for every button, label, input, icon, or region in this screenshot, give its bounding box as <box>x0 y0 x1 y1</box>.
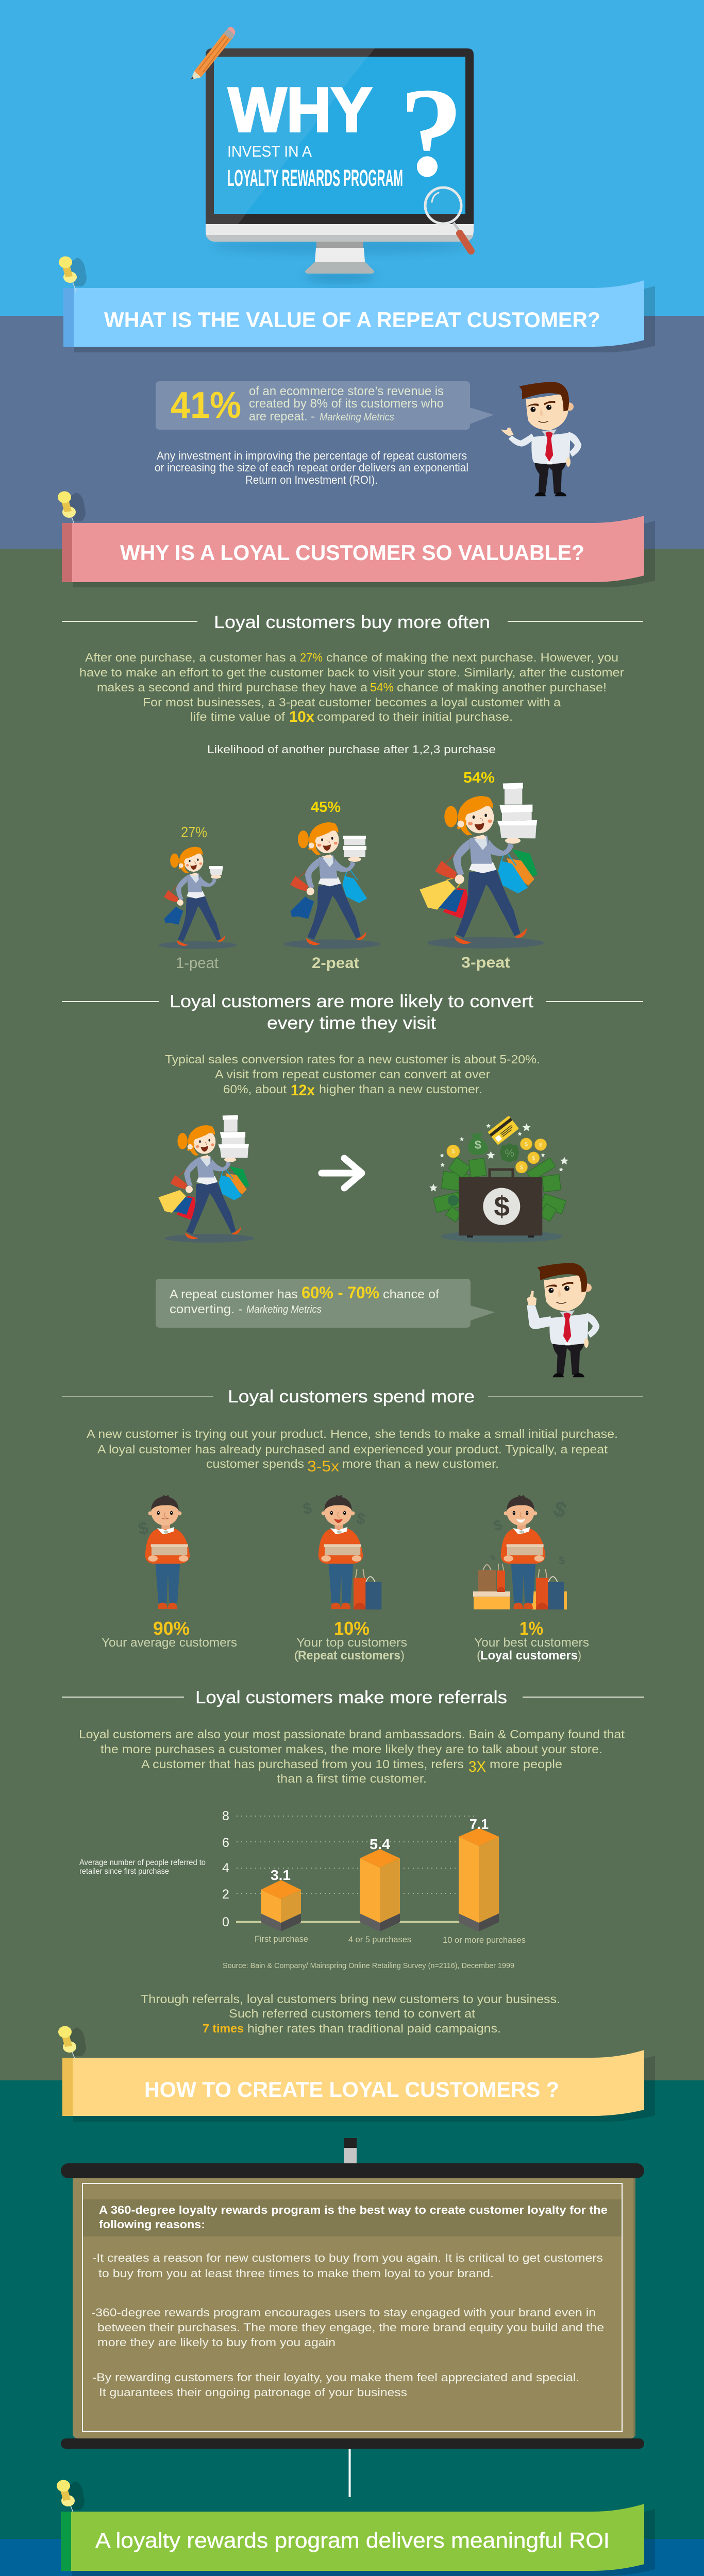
text block: spend more <box>87 1427 618 1475</box>
text block: conversion: Typical sales conversion rates for a new customer is about 5-20%. <box>165 1053 540 1066</box>
text block: spend more: customer spends <box>206 1457 304 1470</box>
title text: WHY <box>228 75 372 145</box>
figure: average customer: 90% <box>153 1618 190 1639</box>
text block: conversion: A visit from repeat customer can convert at over <box>215 1067 490 1081</box>
panel heading: A 360-degree loyalty rewards program is the best way to create customer loyalty for the <box>99 2204 608 2216</box>
callout: 41 percent: of an ecommerce store’s revenue is <box>249 384 444 398</box>
section heading: spend more: Loyal customers spend more <box>228 1387 475 1406</box>
banner: how to create loyal customers: HOW TO CREATE LOYAL CUSTOMERS ? <box>144 2077 559 2102</box>
section heading: more likely to convert: every time they visit <box>267 1013 437 1033</box>
figure: 2-peat shopper: 45% <box>311 799 341 816</box>
figure: best customer: $ <box>492 1517 504 1535</box>
figure: top customer: ( <box>294 1649 299 1663</box>
y axis labels: 4 <box>222 1861 229 1875</box>
text block: referrals: more people <box>490 1757 562 1771</box>
figure: best customer: Your best customers <box>474 1636 589 1650</box>
text block: buy more often: 54% <box>370 681 394 694</box>
icon: briefcase of money <box>429 1115 568 1243</box>
callout: 41 percent <box>156 381 494 430</box>
text block: buy more often: 10x <box>289 708 314 725</box>
icon: briefcase of money: $ <box>451 1149 455 1155</box>
reason 2: -360-degree rewards program encourages users to stay engaged with your brand even in <box>91 2306 596 2319</box>
text block: buy more often: For most businesses, a 3-peat customer becomes a loyal customer with a <box>143 696 561 709</box>
figure: top customer: Repeat customers <box>298 1649 400 1663</box>
figure: 3-peat shopper: 54% <box>463 770 495 786</box>
text block: referrals: 3X <box>468 1758 486 1775</box>
figure: 3-peat shopper <box>420 770 544 971</box>
icon: briefcase of money: $ <box>520 1164 524 1171</box>
icon: briefcase of money: $ <box>532 1155 535 1161</box>
figure: average customer <box>102 1495 237 1650</box>
callout: 41 percent: Marketing Metrics <box>320 412 394 423</box>
text block: buy more often: have to make an effort to get the customer back to visit your store. Similarly, after the customer <box>79 666 624 679</box>
figure: best customer: $ <box>489 1553 497 1562</box>
text block: conversion: higher than a new customer. <box>319 1082 482 1096</box>
big question mark: ? <box>399 61 463 203</box>
text block: buy more often: life time value of <box>190 710 286 723</box>
section heading: more likely to convert: Loyal customers are more likely to convert <box>170 992 534 1011</box>
bar: 4 or 5 purchases <box>360 1836 400 1931</box>
text block: spend more: A new customer is trying out your product. Hence, she tends to make a small initial purchase. <box>87 1427 618 1440</box>
background band: blue <box>0 2539 704 2576</box>
figure: 2-peat shopper <box>284 799 380 972</box>
y axis labels: 0 <box>222 1915 229 1929</box>
text block: spend more: more than a new customer. <box>342 1457 499 1470</box>
text block: spend more: A loyal customer has already purchased and experienced your product. Typically, a repeat <box>97 1443 608 1456</box>
icon: pin <box>58 2026 86 2061</box>
callout: 41 percent: created by 8% of its customers who <box>249 397 444 411</box>
text block: referred customers: Such referred customers tend to convert at <box>229 2007 476 2020</box>
banner: why is a loyal customer so valuable <box>62 516 655 587</box>
text block: referrals <box>79 1727 625 1785</box>
text block: investment: Return on Investment (ROI). <box>245 473 378 486</box>
callout: 41 percent: 41% <box>171 385 241 426</box>
figure: best customer: Loyal customers <box>480 1649 578 1663</box>
y axis title <box>79 1858 206 1876</box>
icon: briefcase of money: % <box>505 1147 514 1159</box>
background band: green <box>0 549 704 2080</box>
icon: pin <box>57 2480 85 2515</box>
background band: teal <box>0 2080 704 2539</box>
text block: conversion: 60%, about <box>223 1082 287 1096</box>
text block: buy more often <box>79 651 624 725</box>
background band: slate <box>0 316 704 549</box>
title monitor: LOYALTY REWARDS PROGRAM <box>227 165 403 191</box>
reason 1: -It creates a reason for new customers to buy from you again. It is critical to get customers <box>92 2251 603 2264</box>
connector line <box>348 2449 350 2497</box>
callout: 60 to 70 percent: A repeat customer has <box>170 1287 298 1301</box>
banner: why is a loyal customer so valuable: WHY IS A LOYAL CUSTOMER SO VALUABLE? <box>120 540 584 565</box>
figure: top customer: Your top customers <box>296 1636 407 1650</box>
figure: best customer: 1% <box>519 1618 543 1639</box>
text block: investment <box>155 449 468 486</box>
figure: top customer: ) <box>400 1649 405 1663</box>
text block: investment: or increasing the size of each repeat order delivers an exponential <box>155 461 468 474</box>
figure: 3-peat shopper: 3-peat <box>461 954 510 971</box>
figure: 2-peat shopper: 2-peat <box>312 955 359 972</box>
text block: buy more often: chance of making another purchase! <box>397 681 607 694</box>
icon: briefcase of money: $ <box>525 1141 528 1147</box>
icon: pencil <box>191 27 235 80</box>
title monitor <box>206 48 474 282</box>
text block: conversion <box>165 1053 540 1099</box>
figure: 1-peat shopper: 27% <box>181 824 207 841</box>
text block: referrals: than a first time customer. <box>277 1772 427 1785</box>
section heading: buy more often: Loyal customers buy more often <box>214 613 490 632</box>
figure: average customer: Your average customers <box>102 1636 237 1650</box>
figure: best customer: $ <box>559 1554 565 1567</box>
icon: businessman open hand <box>501 382 581 496</box>
figure: average customer: $ <box>137 1518 150 1539</box>
figure: best customer: $ <box>550 1496 569 1522</box>
icon: briefcase of money: $ <box>539 1142 543 1148</box>
banner: what is the value of a repeat customer <box>63 280 655 352</box>
text block: conversion: 12x <box>291 1082 315 1099</box>
section heading: more likely to convert <box>62 992 643 1033</box>
banner: loyalty rewards program delivers ROI <box>61 2504 655 2576</box>
figure: top customer <box>294 1495 407 1663</box>
y axis labels: 2 <box>222 1887 229 1902</box>
x axis labels: First purchase <box>255 1934 308 1944</box>
text block: referred customers <box>141 1992 560 2035</box>
banner: how to create loyal customers <box>62 2050 655 2122</box>
figure: 1-peat shopper <box>159 824 237 972</box>
figure: best customer: ) <box>578 1649 581 1663</box>
text block: buy more often: After one purchase, a customer has a <box>85 651 296 664</box>
bar: 10 or more purchases <box>459 1816 499 1931</box>
reason 1 <box>92 2251 603 2280</box>
text block: buy more often: compared to their initial purchase. <box>317 710 513 723</box>
text block: referred customers: higher rates than traditional paid campaigns. <box>247 2022 501 2035</box>
icon: briefcase of money: $ <box>475 1138 481 1151</box>
text block: referrals: A customer that has purchased from you 10 times, refers <box>141 1757 464 1771</box>
figure: best customer <box>473 1495 589 1663</box>
text block: referrals: Loyal customers are also your most passionate brand ambassadors. Bain & Company found that <box>79 1727 625 1741</box>
bar: first purchase: 3.1 <box>271 1867 291 1883</box>
text block: buy more often: 27% <box>300 651 323 664</box>
banner: loyalty rewards program delivers ROI: A loyalty rewards program delivers meaningful ROI <box>95 2528 610 2552</box>
icon: businessman pointing up <box>527 1263 599 1377</box>
y axis title: retailer since first purchase <box>79 1867 169 1876</box>
reason 2: more they are likely to buy from you again <box>97 2336 336 2349</box>
bar: 10 or more purchases: 7.1 <box>470 1816 489 1832</box>
bar chart: referrals by purchases <box>79 1809 526 1945</box>
x axis labels <box>255 1934 526 1945</box>
icon: briefcase of money: $ <box>494 1191 510 1223</box>
figure: 1-peat shopper: 1-peat <box>176 955 219 972</box>
callout: 60 to 70 percent: converting. - <box>170 1302 243 1316</box>
x axis labels: 10 or more purchases <box>443 1935 526 1945</box>
reason 1: to buy from you at least three times to make them loyal to your brand. <box>98 2267 494 2280</box>
panel heading <box>99 2204 608 2231</box>
panel: projector screen <box>61 2138 644 2449</box>
figure: top customer: $ <box>302 1500 313 1518</box>
y axis labels <box>222 1809 229 1929</box>
text block: investment: Any investment in improving the percentage of repeat customers <box>157 449 467 462</box>
callout: 60 to 70 percent: Marketing Metrics <box>246 1304 322 1315</box>
callout: 41 percent: are repeat. - <box>249 410 315 423</box>
panel heading: following reasons: <box>99 2218 205 2231</box>
bar: first purchase <box>261 1867 301 1931</box>
bar: 4 or 5 purchases: 5.4 <box>370 1836 390 1852</box>
callout: 60 to 70 percent: 60% - 70% <box>301 1283 379 1302</box>
x axis labels: 4 or 5 purchases <box>348 1935 411 1944</box>
banner: what is the value of a repeat customer: WHAT IS THE VALUE OF A REPEAT CUSTOMER? <box>104 308 600 332</box>
text block: buy more often: chance of making the next purchase. However, you <box>326 651 618 664</box>
icon: pin <box>59 257 87 292</box>
figure: top customer: 10% <box>334 1618 370 1639</box>
figure: top customer: $ <box>356 1510 366 1528</box>
background band: sky blue <box>0 0 704 316</box>
reason 3: -By rewarding customers for their loyalty, you make them feel appreciated and special. <box>92 2371 579 2384</box>
text block: spend more: 3-5x <box>307 1458 339 1475</box>
monitor stand <box>305 242 374 274</box>
chart source: Source: Bain & Company/ Mainspring Online Retailing Survey (n=2116), December 1999 <box>223 1961 514 1970</box>
text block: referrals: the more purchases a customer makes, the more likely they are to talk about your store. <box>100 1742 602 1756</box>
reason 2 <box>91 2306 604 2349</box>
reason 3 <box>92 2371 579 2399</box>
text block: buy more often: makes a second and third purchase they have a <box>97 681 367 694</box>
title text <box>227 75 403 191</box>
text block: referred customers: Through referrals, loyal customers bring new customers to your business. <box>141 1992 560 2006</box>
callout: 60 to 70 percent <box>156 1279 495 1328</box>
figure: loyal shopper <box>158 1115 254 1243</box>
y axis labels: 6 <box>222 1836 229 1850</box>
title text: INVEST IN A <box>227 142 312 160</box>
reason 3: It guarantees their ongoing patronage of your business <box>99 2386 407 2399</box>
arrow <box>322 1158 362 1188</box>
text block: referred customers: 7 times <box>203 2022 244 2035</box>
icon: magnifying glass <box>425 188 471 251</box>
icon: pin <box>58 492 86 527</box>
monitor body <box>206 48 474 242</box>
figure: best customer: ( <box>477 1649 481 1663</box>
reason 2: between their purchases. The more they engage, the more brand equity you build and the <box>97 2321 604 2334</box>
callout: 60 to 70 percent: chance of <box>383 1287 439 1301</box>
chart caption: likelihood: Likelihood of another purchase after 1,2,3 purchase <box>207 743 496 756</box>
section heading: more referrals: Loyal customers make more referrals <box>195 1688 507 1707</box>
y axis labels: 8 <box>222 1809 229 1823</box>
y axis title: Average number of people referred to <box>79 1858 206 1867</box>
